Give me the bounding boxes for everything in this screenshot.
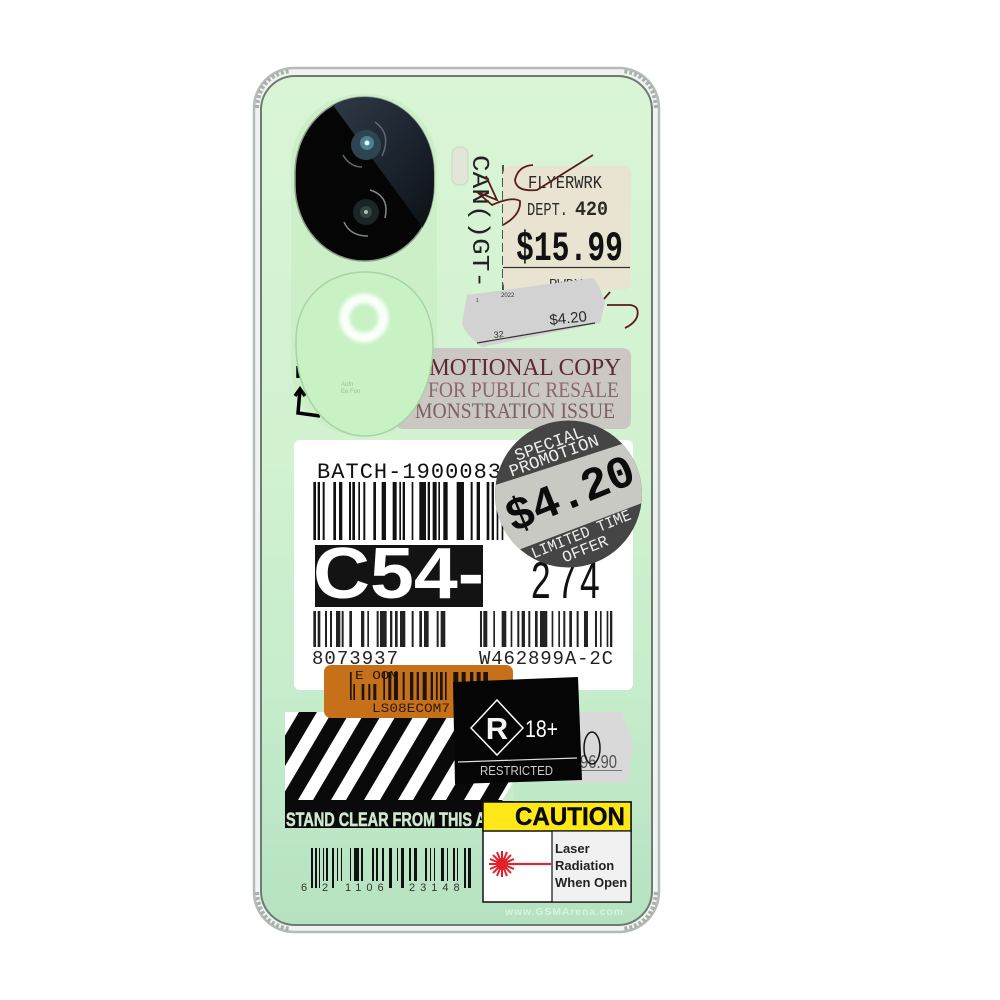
barcode numbers: 8073937 [312, 648, 398, 670]
grey price sticker: $4.20 [549, 308, 588, 329]
lower left barcode [313, 611, 445, 647]
orange barcode sticker [324, 665, 513, 718]
price tag: FLYERWRK [528, 174, 602, 194]
274 digits: 274 [531, 552, 600, 610]
phone case [254, 68, 659, 932]
camera module [295, 97, 440, 261]
grey price sticker: 1 [476, 298, 479, 304]
lower disc with ring light: Ee Fon [341, 389, 360, 395]
lower right barcode [480, 611, 612, 647]
bottom barcode: 1106 [345, 882, 389, 894]
caution label: CAUTION [515, 803, 625, 831]
hazard stripes [285, 712, 514, 828]
batch number: BATCH-1900083 [317, 460, 501, 485]
special promotion disc [495, 420, 642, 568]
camera island [291, 94, 440, 436]
special promotion disc: OFFER [560, 532, 611, 567]
lens top [343, 122, 386, 167]
C54 block: C54- [313, 534, 484, 614]
promotional copy box: MOTIONAL COPY [429, 355, 621, 381]
white batch label: W462899A-2C [479, 648, 613, 670]
special promotion disc: PROMOTION [507, 432, 602, 482]
white batch label [294, 440, 633, 690]
price tag: $15.99 [516, 225, 623, 273]
caution label: When Open [555, 875, 627, 890]
grey price sticker [462, 278, 605, 347]
caution label [483, 802, 631, 902]
R 18+ restricted sticker: 18+ [525, 716, 558, 743]
bottom barcode [301, 848, 471, 894]
R 18+ restricted sticker: RESTRICTED [480, 763, 553, 778]
grey price sticker: 32 [493, 329, 504, 340]
grey price sticker: 2022 [501, 293, 515, 299]
black scribble [295, 366, 320, 416]
vertical code text: CAN()GT- [465, 155, 492, 288]
small grey tag: 96.90 [580, 752, 617, 772]
R 18+ restricted sticker [453, 677, 582, 784]
price tag [503, 166, 631, 293]
lower disc with ring light [296, 272, 433, 436]
flash [452, 147, 468, 185]
caution label: Radiation [555, 858, 614, 873]
watermark: www.GSMArena.com [504, 906, 623, 918]
price tag: PWDY [549, 277, 583, 293]
bottom barcode: 6 [301, 882, 307, 894]
icon: laser starburst [489, 851, 552, 877]
dashed tag edge [502, 165, 504, 290]
promotional copy box: FOR PUBLIC RESALE [428, 377, 619, 402]
maroon scribbles [477, 155, 638, 328]
caution label: Laser [555, 841, 590, 856]
small grey tag [570, 712, 633, 783]
lens bottom [344, 190, 386, 236]
lower disc with ring light: Aufn [341, 382, 353, 388]
main barcode [313, 482, 503, 540]
promotional copy box: MONSTRATION ISSUE [415, 398, 615, 423]
price tag: DEPT. [527, 201, 568, 221]
orange barcode sticker: LS08ECOM7 [372, 701, 450, 716]
bottom barcode: 23148 [409, 882, 465, 894]
special promotion disc: LIMITED TIME [529, 507, 634, 563]
orange barcode sticker: E OOM [355, 669, 398, 683]
hazard stripes: STAND CLEAR FROM THIS A [286, 809, 486, 831]
special promotion disc: $4.20 [499, 446, 643, 545]
R 18+ restricted sticker: R [486, 711, 508, 746]
bottom barcode: 2 [322, 882, 328, 894]
promotional copy box [395, 348, 631, 429]
special promotion disc: SPECIAL [512, 424, 587, 467]
price tag: 420 [575, 199, 608, 222]
